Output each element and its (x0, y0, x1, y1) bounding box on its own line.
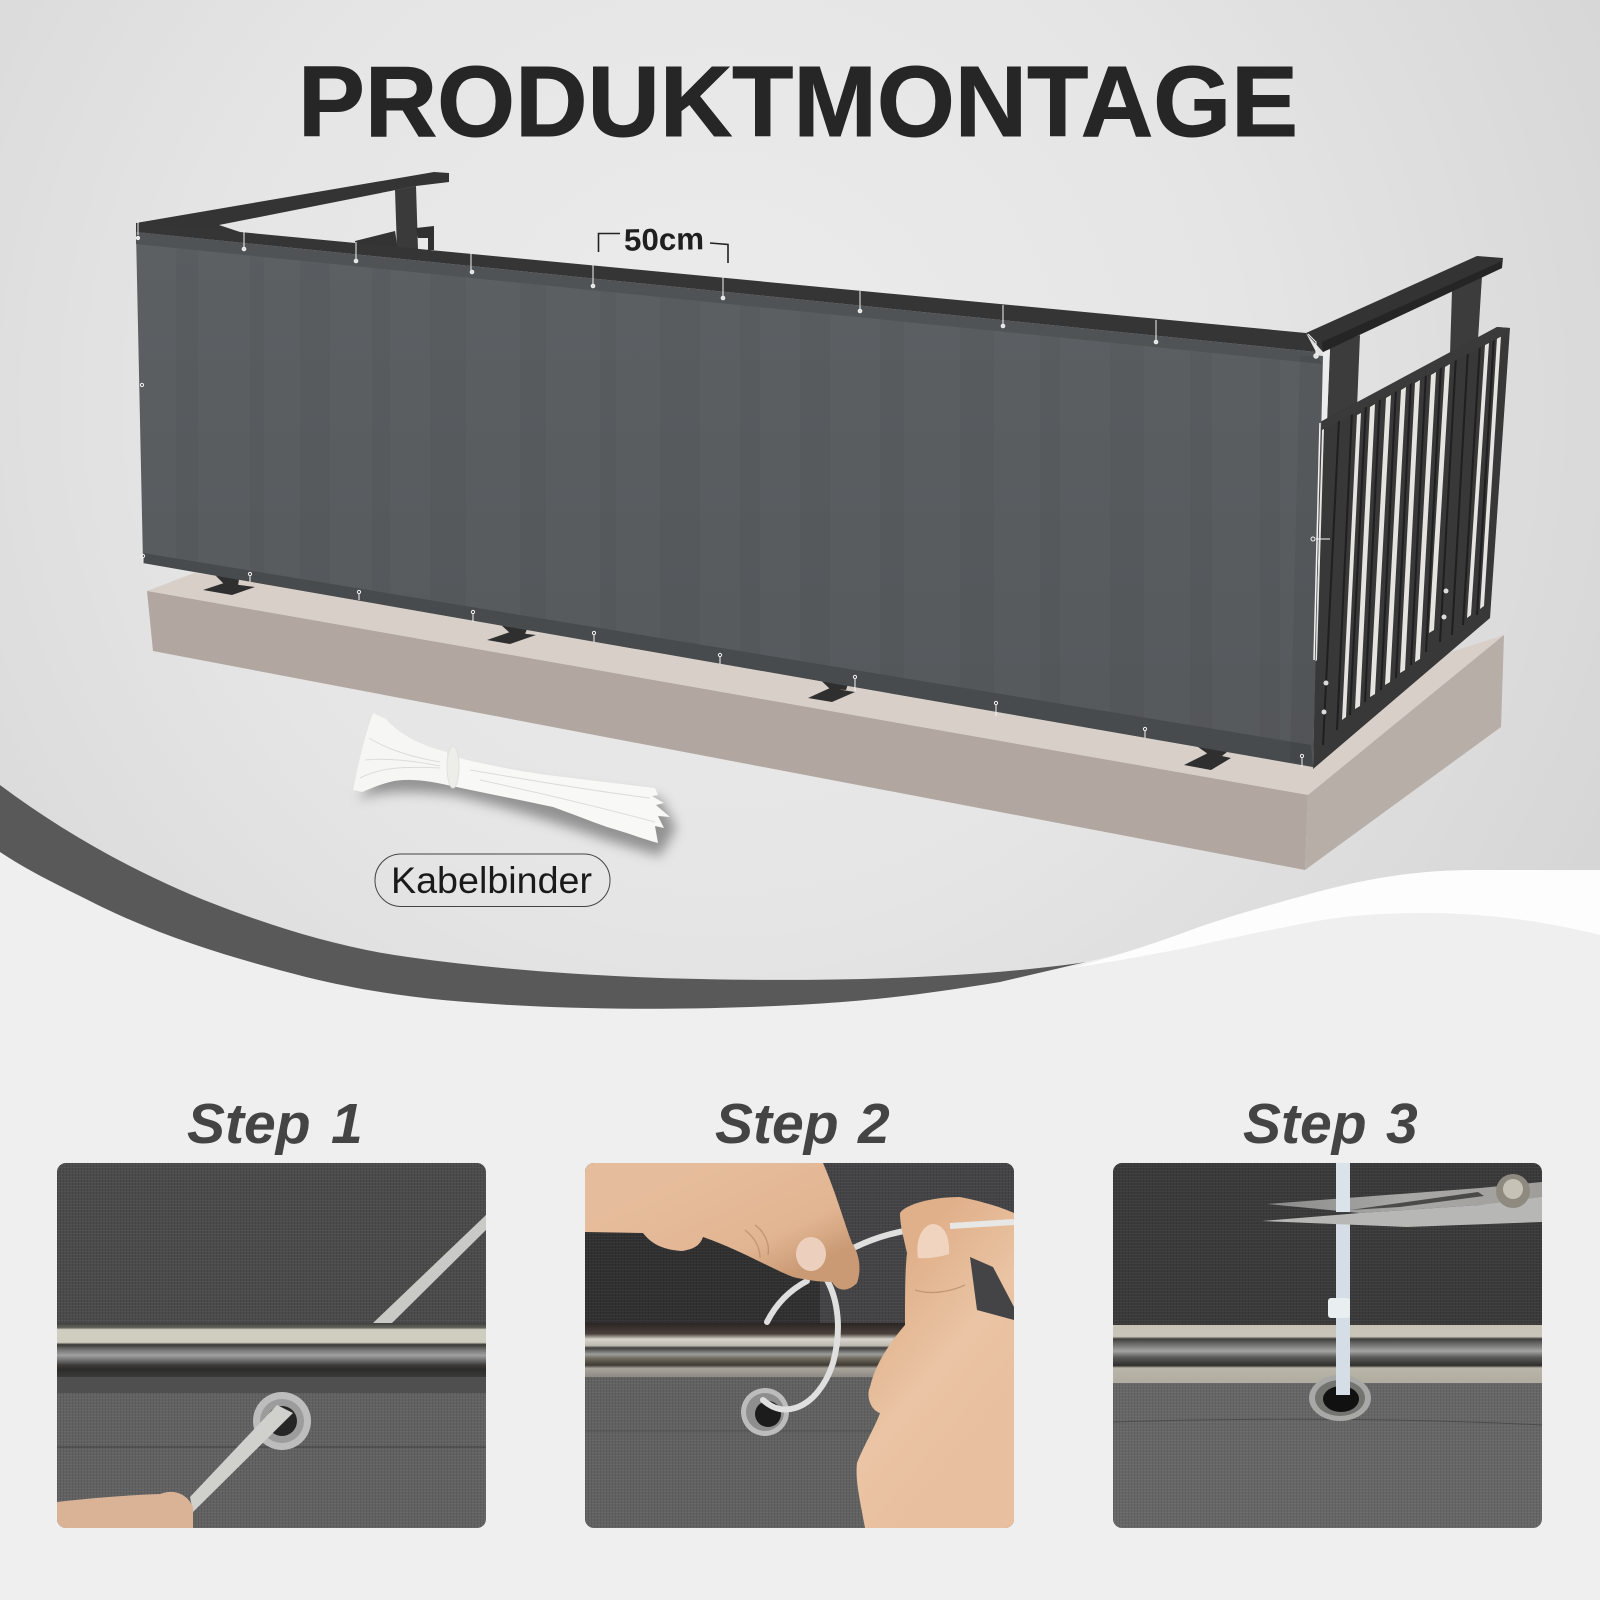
baluster panel (1313, 327, 1510, 769)
steel rail (57, 1323, 486, 1377)
screws (1322, 588, 1448, 714)
cable tie lower (1336, 1222, 1350, 1395)
fabric lower (57, 1393, 486, 1528)
lower cable tie (190, 1405, 293, 1512)
step 3 heading: Step (1243, 1092, 1367, 1156)
fabric upper (1113, 1163, 1542, 1328)
Kabelbinder label (375, 854, 610, 906)
fabric lower (1113, 1380, 1542, 1528)
finger creases (745, 1225, 965, 1292)
upper grey backdrop (0, 0, 1600, 980)
fabric upper (585, 1163, 1014, 1328)
step 2 heading: 2 (857, 1092, 890, 1156)
top rail over mesh (136, 223, 1316, 352)
finger (57, 1492, 193, 1528)
fabric lower (585, 1372, 1014, 1528)
tie strand details (360, 738, 655, 822)
step 3 photo (1113, 1163, 1542, 1528)
tie heads fan (353, 713, 447, 792)
grommet (741, 1388, 789, 1436)
mesh right edge (1290, 356, 1323, 767)
title: PRODUKTMONTAGE (298, 46, 1298, 158)
white edge line (1314, 423, 1320, 660)
grommet (1309, 1375, 1371, 1421)
tie across right thumb (950, 1222, 1014, 1226)
scissors upper blade (1267, 1182, 1542, 1213)
scissors lower blade and pivot (1262, 1174, 1542, 1227)
baluster shading (1323, 336, 1494, 745)
lattice top rail (1322, 327, 1510, 430)
light gap behind post (1320, 350, 1330, 423)
mesh top hem (136, 232, 1322, 364)
privacy screen mesh (136, 230, 1323, 770)
step 1 heading: Step (187, 1092, 311, 1156)
cable tie hooks (136, 220, 1330, 767)
handrail (1306, 256, 1503, 352)
50cm dimension label (598, 221, 728, 263)
white swoosh (1072, 870, 1600, 968)
step 1 photo (57, 1163, 486, 1528)
tie band (447, 746, 459, 788)
tie lock (1328, 1298, 1350, 1318)
steel rail (1113, 1325, 1542, 1383)
floor brackets (203, 565, 1232, 770)
baluster gaps (1315, 336, 1501, 720)
mesh vertical stripes (176, 230, 1280, 770)
step 2 (585, 1092, 1014, 1528)
dimension bracket right (710, 243, 728, 263)
fabric upper (57, 1163, 486, 1328)
label text: Kabelbinder (391, 860, 592, 901)
rail posts (1327, 335, 1360, 424)
step 2 photo (585, 1163, 1014, 1528)
right side railing (1306, 256, 1510, 769)
label pill (375, 854, 610, 906)
step 2 heading: Step (715, 1092, 839, 1156)
grommet (253, 1392, 311, 1450)
concrete slab (147, 573, 1504, 870)
step 1 heading: 1 (331, 1092, 363, 1156)
steel rail (585, 1323, 905, 1377)
bundle shadow (358, 770, 676, 856)
thumb nail right (917, 1224, 949, 1258)
left hand (585, 1163, 859, 1290)
dimension bracket left (598, 234, 620, 252)
right hand (857, 1197, 1014, 1528)
mesh bottom hem (143, 553, 1313, 767)
step 3 heading: 3 (1386, 1092, 1418, 1156)
back left railing (136, 172, 449, 250)
cable tie bundle (353, 713, 676, 856)
upper cable tie (373, 1215, 486, 1323)
cable tie loop (760, 1228, 903, 1412)
cable tie upper (1336, 1163, 1350, 1212)
balcony illustration (136, 172, 1510, 870)
thumb nail left (796, 1237, 826, 1271)
step 1 (57, 1092, 486, 1528)
step 3 (1113, 1092, 1542, 1528)
fabric gap between fingers (970, 1257, 1014, 1320)
dimension text: 50cm (624, 221, 704, 258)
handrail face (1322, 261, 1502, 352)
dark swoosh (0, 785, 1086, 1009)
tie tails (447, 755, 670, 843)
